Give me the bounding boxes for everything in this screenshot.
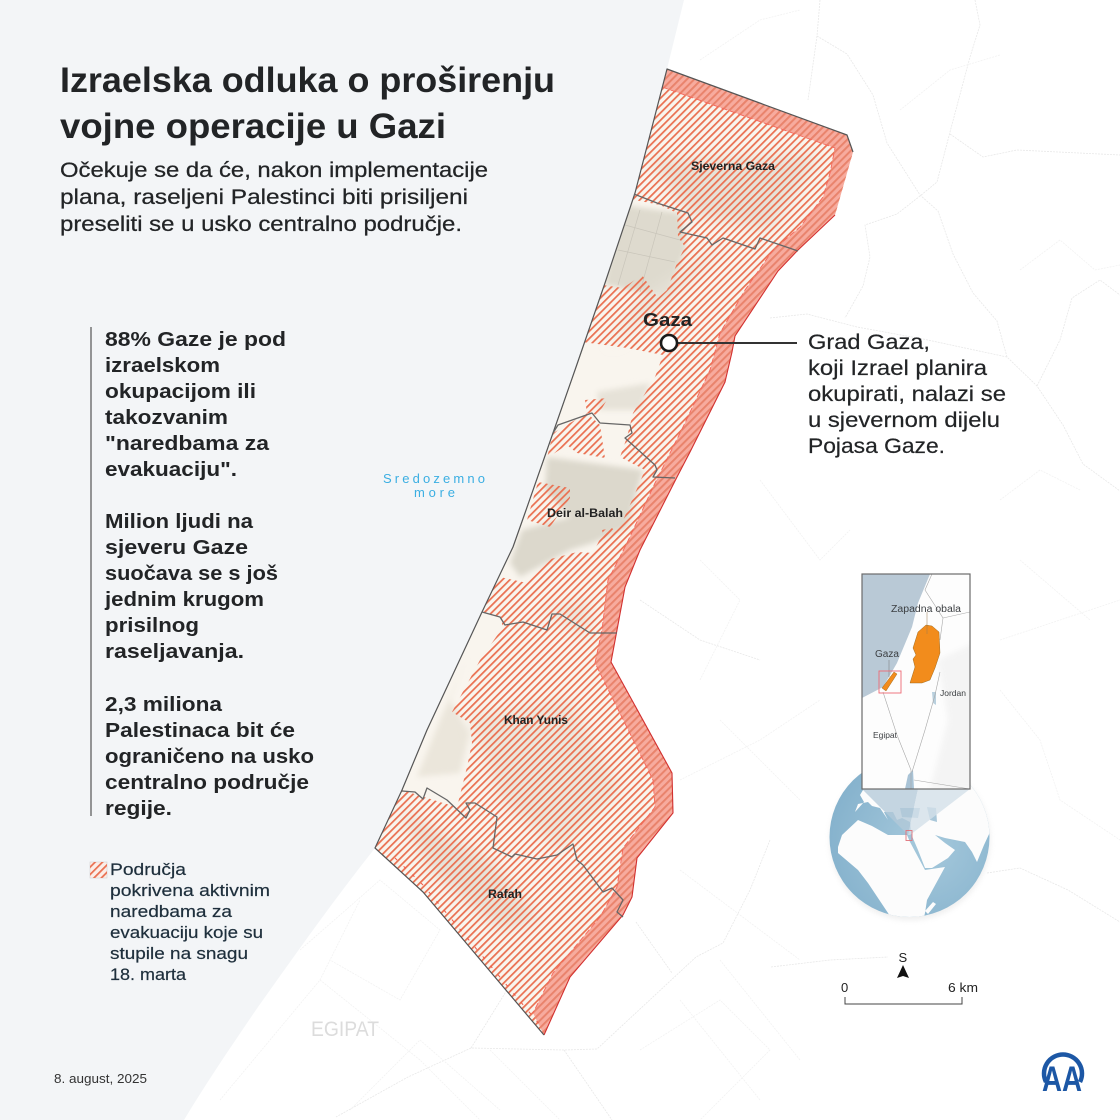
district label: Rafah: Rafah bbox=[488, 887, 522, 901]
inset frame bbox=[862, 574, 970, 789]
legend text: pokrivena aktivnim bbox=[110, 882, 270, 900]
title: Izraelska odluka o proširenju bbox=[60, 61, 555, 100]
key facts text block: sjeveru Gaze bbox=[105, 536, 248, 559]
inset labels: Egipat bbox=[873, 730, 898, 740]
key facts text block: "naredbama za bbox=[105, 432, 270, 455]
Gaza city marker bbox=[643, 310, 797, 351]
active evacuation buffer along border bbox=[533, 69, 853, 1035]
sea label: more bbox=[414, 485, 455, 500]
legend text: 18. marta bbox=[110, 966, 187, 984]
district label: Sjeverna Gaza: Sjeverna Gaza bbox=[691, 159, 775, 173]
locator red box bbox=[906, 830, 912, 840]
outline bbox=[375, 69, 853, 1035]
sea label: Sredozemno bbox=[383, 471, 485, 486]
district label: Khan Yunis: Khan Yunis bbox=[504, 713, 568, 727]
base map: faint roads bbox=[336, 0, 1120, 1120]
base map: faint Sinai grid bbox=[220, 10, 1120, 1120]
sea bbox=[0, 0, 684, 1120]
West Bank bbox=[910, 625, 940, 683]
scale bar bbox=[841, 980, 978, 1004]
callout: Gaza City: Pojasa Gaze. bbox=[808, 434, 945, 458]
locator globe bbox=[830, 773, 990, 920]
key facts text block: takozvanim bbox=[105, 406, 228, 429]
Gaza locator shape bbox=[882, 672, 897, 691]
date: 8. august, 2025 bbox=[54, 1072, 147, 1086]
district label: Deir al-Balah: Deir al-Balah bbox=[547, 506, 623, 520]
north arrow bbox=[897, 950, 909, 978]
inset labels: Gaza bbox=[875, 649, 899, 660]
legend text: naredbama za bbox=[110, 903, 233, 921]
evacuation-order hatching bbox=[376, 88, 852, 1033]
key facts text block: ograničeno na usko bbox=[105, 745, 314, 768]
legend text: Područja bbox=[110, 861, 187, 879]
legend text: evakuaciju koje su bbox=[110, 924, 263, 942]
key facts text block: suočava se s još bbox=[105, 562, 278, 585]
country label: Egipat: EGIPAT bbox=[311, 1018, 379, 1041]
sea label bbox=[383, 471, 485, 500]
callout: Gaza City: koji Izrael planira bbox=[808, 356, 987, 380]
south border dashes bbox=[395, 858, 540, 1025]
key facts text block: okupacijom ili bbox=[105, 380, 256, 403]
legend swatch bbox=[90, 862, 107, 878]
callout: Gaza City: Grad Gaza, bbox=[808, 330, 930, 354]
key facts text block: Milion ljudi na bbox=[105, 510, 254, 533]
urban patches bbox=[400, 155, 820, 930]
inset land bbox=[862, 574, 970, 789]
key facts text block: centralno područje bbox=[105, 771, 309, 794]
key facts text block: raseljavanja. bbox=[105, 640, 244, 663]
key facts text block: prisilnog bbox=[105, 614, 199, 637]
callout: Gaza City bbox=[808, 330, 1006, 458]
key facts text block: 88% Gaze je pod bbox=[105, 328, 286, 351]
callout: Gaza City: u sjevernom dijelu bbox=[808, 408, 1000, 432]
key facts text block: Palestinaca bit će bbox=[105, 719, 295, 742]
east border line bbox=[544, 215, 835, 1035]
globe ocean bbox=[830, 757, 990, 917]
inset labels bbox=[873, 604, 966, 740]
red locator box bbox=[879, 671, 901, 693]
north arrow: S bbox=[898, 950, 908, 965]
scale bar: 0 bbox=[841, 980, 848, 995]
globe land bbox=[838, 786, 990, 917]
legend text bbox=[110, 861, 270, 984]
legend text: stupile na snagu bbox=[110, 945, 248, 963]
inset map bbox=[862, 574, 980, 789]
inset labels: Zapadna obala bbox=[891, 604, 961, 615]
Gaza city marker: Gaza bbox=[643, 310, 693, 330]
subtitle bbox=[60, 158, 488, 236]
scale bar: 6 km bbox=[948, 980, 978, 995]
subtitle: Očekuje se da će, nakon implementacije bbox=[60, 158, 488, 182]
key facts text block: evakuaciju". bbox=[105, 458, 237, 481]
legend bbox=[90, 861, 270, 984]
key facts text block: regije. bbox=[105, 797, 172, 820]
map: Gaza Strip bbox=[374, 68, 854, 1036]
key facts text block: jednim krugom bbox=[104, 588, 264, 611]
subtitle: plana, raseljeni Palestinci biti prisiljeni bbox=[60, 185, 468, 209]
key facts text block: 2,3 miliona bbox=[105, 693, 223, 716]
logo: AA: AA bbox=[1042, 1060, 1082, 1099]
inset labels: Jordan bbox=[940, 688, 966, 698]
inset sea bbox=[862, 574, 930, 698]
subtitle: preseliti se u usko centralno područje. bbox=[60, 212, 462, 236]
callout: Gaza City: okupirati, nalazi se bbox=[808, 382, 1006, 406]
title: vojne operacije u Gazi bbox=[60, 107, 446, 146]
key facts text block bbox=[90, 327, 314, 820]
globe shadow bbox=[830, 760, 990, 920]
strip base bbox=[375, 69, 853, 1035]
locator cone bbox=[862, 789, 970, 835]
governorate boundaries bbox=[402, 194, 798, 917]
buffer inner edge bbox=[533, 87, 835, 1013]
title bbox=[60, 61, 555, 146]
key facts text block: izraelskom bbox=[105, 354, 220, 377]
